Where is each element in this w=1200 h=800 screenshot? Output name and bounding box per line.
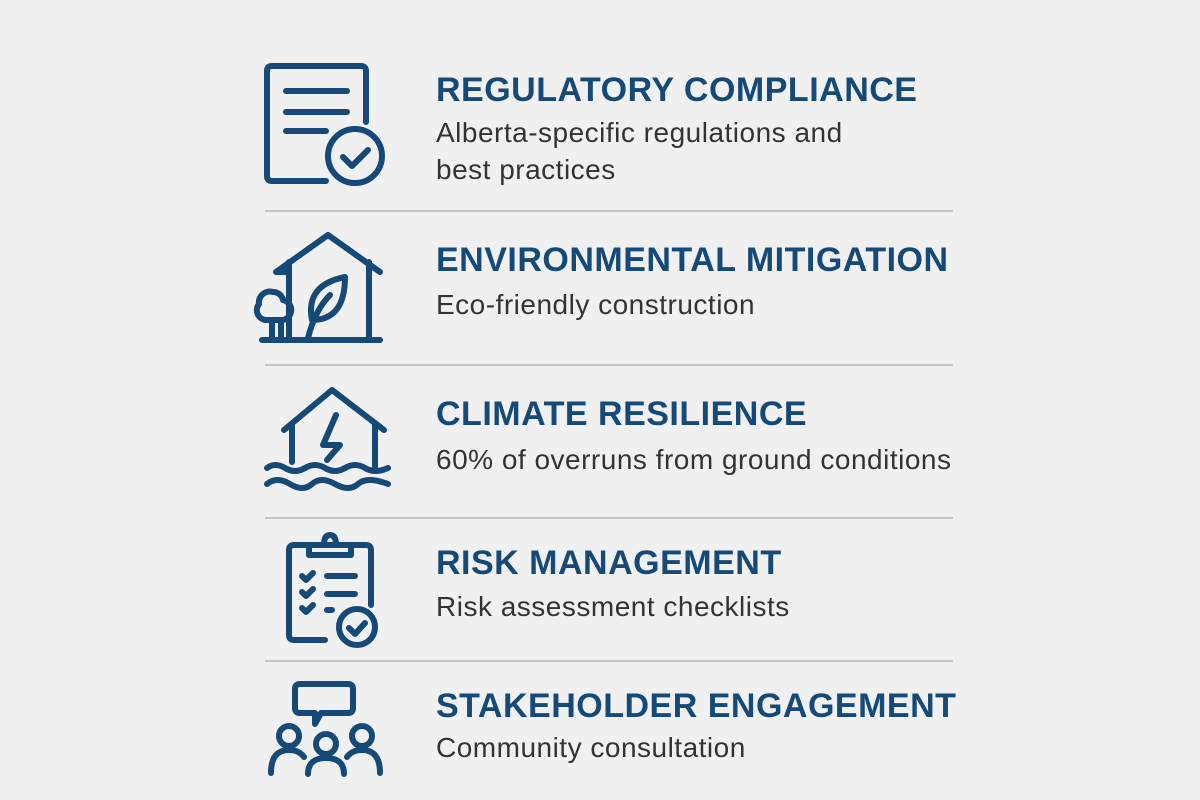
text: regulatory description: Alberta-specific regulations and xyxy=(436,117,843,148)
text: regulatory description xyxy=(436,117,843,185)
icon: eco house xyxy=(257,235,380,340)
text: risk description: Risk assessment checklists xyxy=(436,591,790,622)
title: stakeholder engagement: STAKEHOLDER ENGAGEMENT xyxy=(436,687,956,725)
icon: document check xyxy=(267,66,382,183)
title: risk management: RISK MANAGEMENT xyxy=(436,544,782,582)
icon: checklist xyxy=(289,535,375,645)
title: regulatory compliance: REGULATORY COMPLIANCE xyxy=(436,71,918,109)
text: environmental description: Eco-friendly construction xyxy=(436,289,755,320)
title: environmental mitigation: ENVIRONMENTAL MITIGATION xyxy=(436,241,949,279)
icon: flood house xyxy=(267,390,388,488)
text: stakeholder description: Community consultation xyxy=(436,732,746,763)
text: regulatory description: best practices xyxy=(436,154,616,185)
title: climate resilience: CLIMATE RESILIENCE xyxy=(436,395,807,433)
text: climate description: 60% of overruns from ground conditions xyxy=(436,444,952,475)
icon: stakeholders xyxy=(271,684,380,774)
